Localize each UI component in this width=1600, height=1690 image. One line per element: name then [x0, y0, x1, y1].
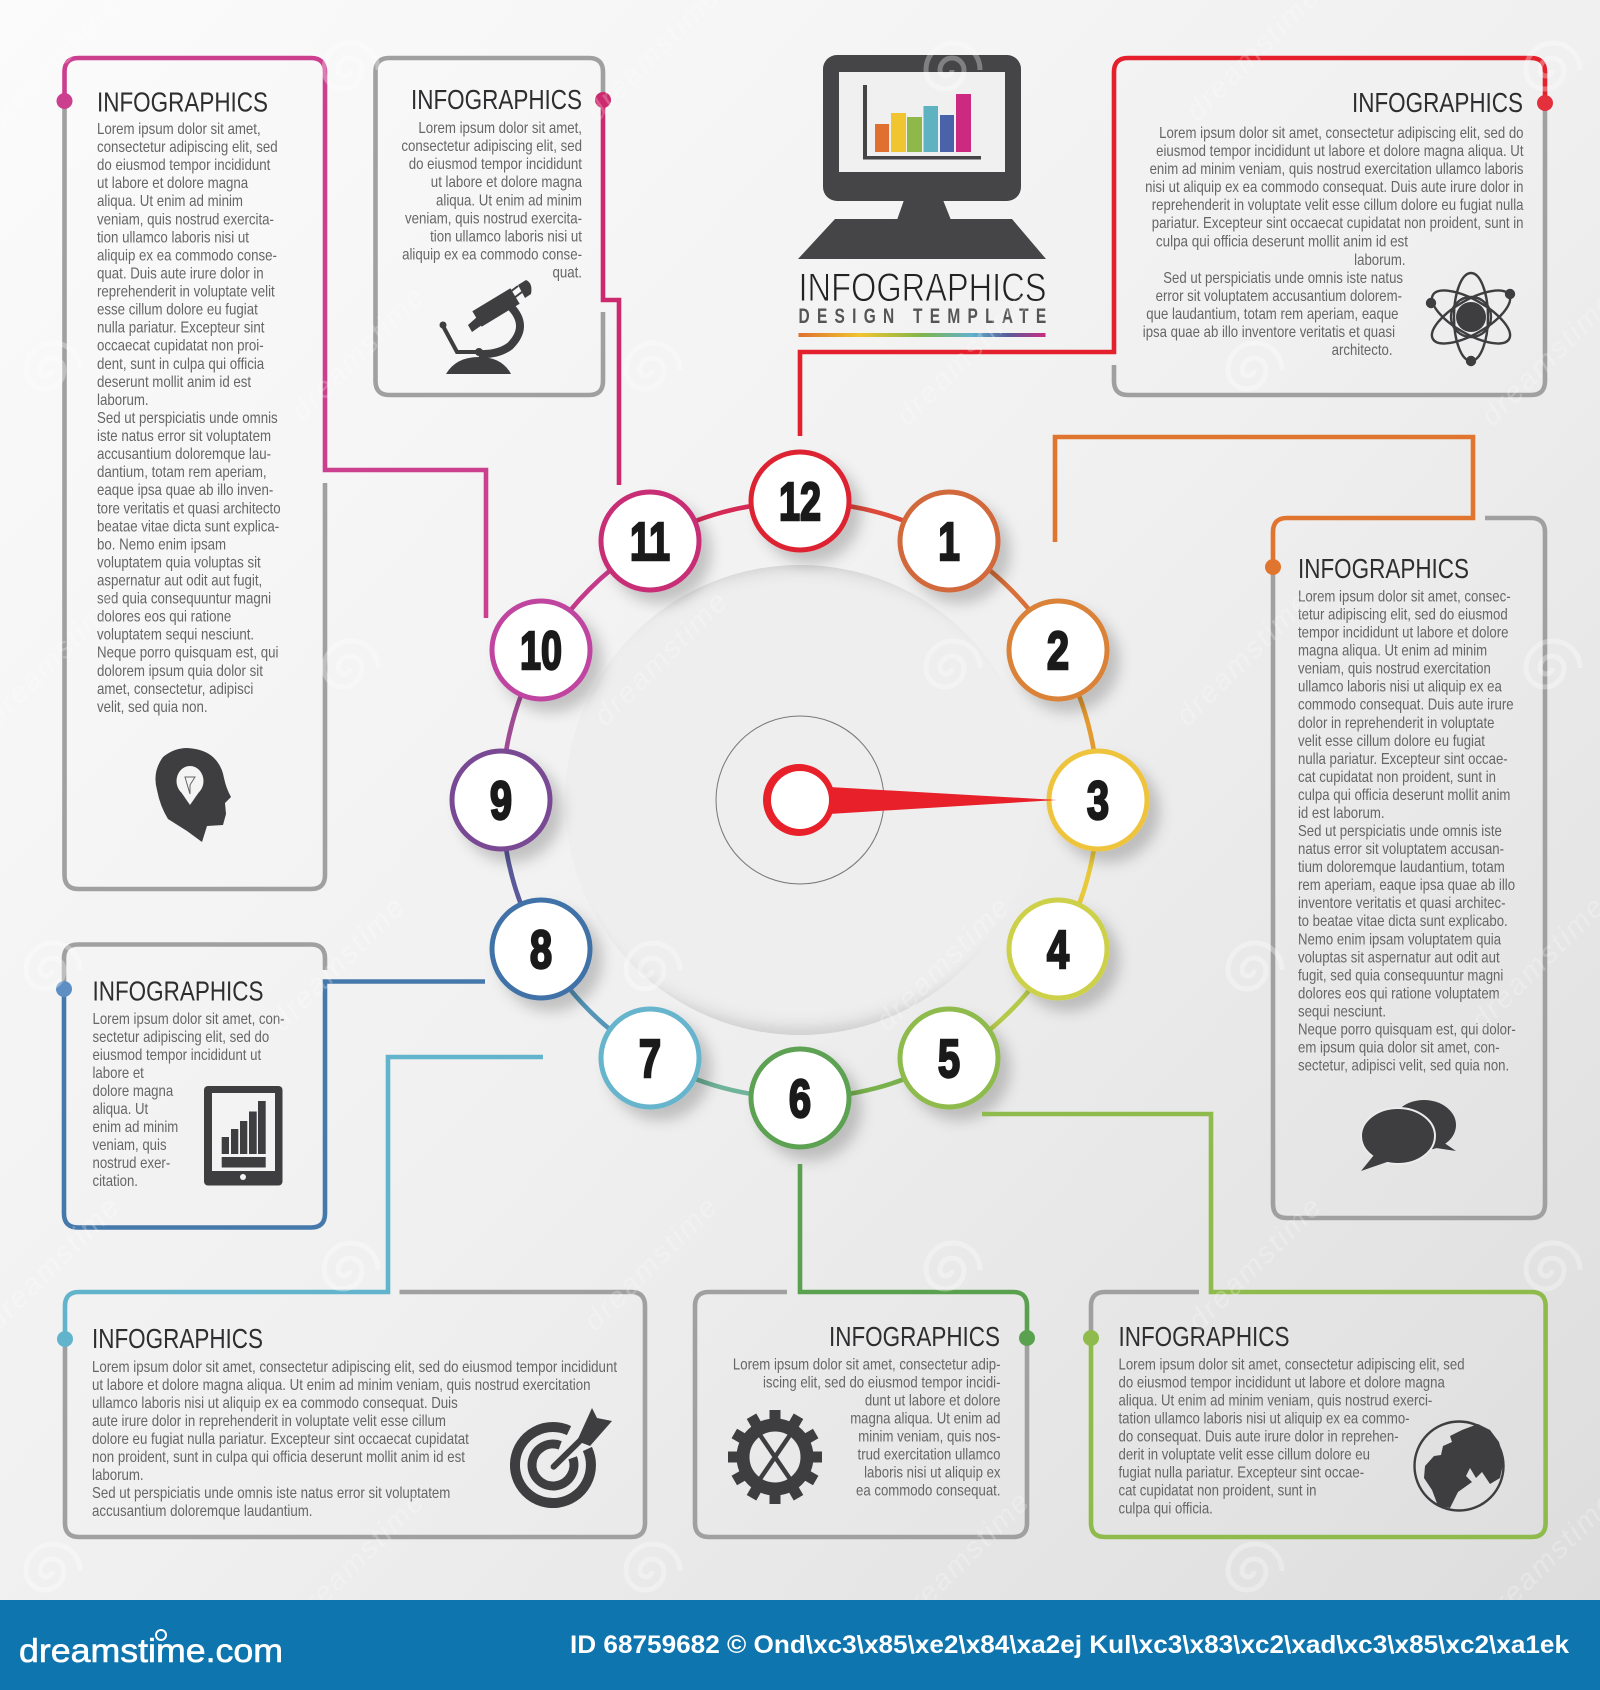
body text: iste natus error sit voluptatem: [97, 428, 271, 445]
body text: commodo consequat. Duis aute irure: [1298, 697, 1514, 714]
body text: laborum.: [97, 392, 149, 409]
body text: derit in voluptate velit esse cillum dolore eu: [1118, 1446, 1370, 1464]
dot: [1019, 1330, 1035, 1346]
icon: atom: [1424, 273, 1518, 365]
panel 7: bottom left panel: [57, 1057, 645, 1537]
body text: Lorem ipsum dolor sit amet, consectetur adipiscing elit, sed do eiusmod tempor incididunt: [92, 1359, 617, 1376]
body text: iscing elit, sed do eiusmod tempor incidi-: [763, 1374, 1001, 1392]
body text: Neque porro quisquam est, qui dolor-: [1298, 1021, 1516, 1039]
text: dreamstime: [889, 284, 1037, 432]
logo spiral: [156, 1630, 166, 1640]
body text: quat.: [552, 265, 582, 282]
body text: magna aliqua. Ut enim ad minim: [1298, 643, 1487, 660]
node 2: [1009, 601, 1107, 699]
body text: consectetur adipiscing elit, sed: [401, 138, 582, 155]
body text: culpa qui officia deserunt mollit anim: [1298, 787, 1510, 804]
body text: tium doloremque laudantium, totam: [1298, 859, 1505, 876]
title block with computer: [798, 55, 1046, 337]
node 1: [900, 492, 998, 590]
body text: amet, consectetur, adipisci: [97, 681, 253, 698]
text: dreamstime: [889, 1484, 1037, 1632]
dot: [1537, 95, 1553, 111]
body text: error sit voluptatem accusantium dolorem-: [1156, 288, 1402, 305]
body text: culpa qui officia deserunt mollit anim id est: [1156, 234, 1408, 251]
body text: labore et: [92, 1065, 144, 1082]
heading: INFOGRAPHICS: [1118, 1321, 1290, 1352]
body text: em ipsum quia dolor sit amet, con-: [1298, 1039, 1500, 1057]
dot: [57, 1331, 73, 1347]
footer logo: dreamstime.com: [19, 1632, 283, 1669]
body text: eaque ipsa quae ab illo inven-: [97, 482, 273, 500]
node 10: [492, 601, 590, 699]
body text: trud exercitation ullamco: [858, 1446, 1000, 1464]
body text: tore veritatis et quasi architecto: [97, 500, 281, 518]
body text: non proident, sunt in culpa qui officia deserunt mollit anim id est: [92, 1449, 465, 1466]
rainbow bar: [798, 333, 1046, 337]
panel 12: top right panel: [800, 58, 1553, 436]
text: dreamstime: [1169, 584, 1317, 732]
needle and hub: [763, 764, 1057, 836]
text: dreamstime: [869, 889, 1017, 1037]
body text: eiusmod tempor incididunt ut: [92, 1047, 261, 1064]
node 11: [601, 492, 699, 590]
body text: ut labore et dolore magna: [431, 174, 583, 192]
body text: deserunt mollit anim id est: [97, 374, 251, 391]
body text: inventore veritatis et quasi architec-: [1298, 895, 1506, 913]
body text: nulla pariatur. Excepteur sint occae-: [1298, 751, 1508, 768]
body text: Lorem ipsum dolor sit amet, consectetur adipiscing elit, sed: [1118, 1356, 1465, 1374]
recessed disk: [626, 565, 954, 1035]
text: dreamstime: [284, 279, 432, 427]
icon: head with lightbulb: [155, 748, 231, 842]
heading: INFOGRAPHICS: [411, 84, 582, 115]
node 9: 9: [490, 771, 512, 832]
body text: sed quia consequuntur magni: [97, 591, 271, 608]
icon: microscope: [440, 280, 531, 374]
body text: do eiusmod tempor incididunt ut labore et dolore magna: [1118, 1374, 1446, 1392]
node 4: 4: [1047, 920, 1070, 981]
body text: fugiat nulla pariatur. Excepteur sint occae-: [1118, 1464, 1364, 1482]
center dial: [452, 452, 1147, 1147]
body text: citation.: [92, 1173, 138, 1190]
node 9: [452, 751, 550, 849]
node 8: [492, 900, 590, 998]
node 11: 11: [630, 511, 670, 572]
node 5: [900, 1009, 998, 1107]
body text: aliquip ex ea commodo conse-: [402, 246, 582, 264]
body text: Lorem ipsum dolor sit amet, consec-: [1298, 588, 1511, 606]
footer credit: ID 68759682 © Ond\xc3\x85\xe2\x84\xa2ej Kul\xc3\x83\xc2\xad\xc3\x85\xc2\xa1ek: [570, 1631, 1569, 1659]
text: dreamstime: [264, 889, 412, 1037]
body text: ut labore et dolore magna aliqua. Ut enim ad minim veniam, quis nostrud exercitation: [92, 1377, 590, 1394]
body text: Sed ut perspiciatis unde omnis: [97, 410, 278, 427]
node 7: [601, 1009, 699, 1107]
panel 2: right tall panel: [1055, 437, 1545, 1218]
body text: veniam, quis nostrud exercita-: [97, 211, 274, 229]
main title: INFOGRAPHICS: [798, 266, 1046, 310]
body text: ipsa quae ab illo inventore veritatis et quasi: [1143, 324, 1395, 341]
body text: Lorem ipsum dolor sit amet, consectetur adip-: [733, 1356, 1001, 1374]
heading: INFOGRAPHICS: [97, 86, 268, 118]
node 12: 12: [779, 471, 821, 532]
body text: ullamco laboris nisi ut aliquip ex ea: [1298, 679, 1503, 696]
heading: INFOGRAPHICS: [1352, 87, 1523, 118]
dot: [56, 93, 72, 109]
body text: Lorem ipsum dolor sit amet,: [418, 120, 582, 137]
body text: voluptatem sequi nesciunt.: [97, 627, 254, 644]
body text: tion ullamco laboris nisi ut: [430, 228, 582, 246]
body text: tation ullamco laboris nisi ut aliquip ex ea commo-: [1118, 1410, 1410, 1428]
body text: [1143, 125, 1524, 359]
panel 5: bottom right panel: [982, 1114, 1546, 1537]
node 6: [751, 1049, 849, 1147]
body text: Sed ut perspiciatis unde omnis iste natus: [1163, 270, 1403, 287]
heading: INFOGRAPHICS: [92, 976, 264, 1006]
node 4: [1009, 900, 1107, 998]
body text: ullamco laboris nisi ut aliquip ex ea commodo consequat. Duis: [92, 1395, 458, 1412]
body text: tion ullamco laboris nisi ut: [97, 229, 249, 247]
body text: id est laborum.: [1298, 805, 1385, 822]
body text: nulla pariatur. Excepteur sint: [97, 320, 264, 337]
body text: dolor in reprehenderit in voluptate: [1298, 715, 1495, 732]
body text: dolore eu fugiat nulla pariatur. Excepteur sint occaecat cupidatat: [92, 1431, 469, 1448]
text: dreamstime: [587, 584, 735, 732]
body text: laborum.: [1354, 252, 1406, 269]
node 6: 6: [789, 1069, 811, 1130]
heading: INFOGRAPHICS: [829, 1321, 1000, 1352]
body text: tempor incididunt ut labore et dolore: [1298, 624, 1508, 642]
node 2: 2: [1047, 621, 1069, 682]
body text: culpa qui officia.: [1118, 1500, 1213, 1518]
body text: dolores eos qui ratione: [97, 609, 231, 626]
body text: pariatur. Excepteur sint occaecat cupidatat non proident, sunt in: [1152, 215, 1524, 232]
panel 8: tablet panel: [56, 944, 485, 1228]
icon: gear: [728, 1410, 822, 1504]
body text: Lorem ipsum dolor sit amet,: [97, 121, 261, 138]
icon: chat bubbles: [1361, 1100, 1456, 1171]
body text: consectetur adipiscing elit, sed: [97, 139, 278, 156]
panel 10: left tall panel: [56, 58, 486, 889]
icon: globe: [1414, 1422, 1504, 1510]
body text: minim veniam, quis nos-: [858, 1428, 1001, 1446]
body text: beatae vitae dicta sunt explica-: [97, 518, 279, 536]
body text: dunt ut labore et dolore: [865, 1392, 1000, 1410]
body text: do eiusmod tempor incididunt: [409, 156, 582, 173]
dot: [56, 981, 72, 997]
body text: voluptatem quia voluptas sit: [97, 554, 261, 572]
body text: veniam, quis nostrud exercitation: [1298, 661, 1491, 678]
node 8: 8: [530, 920, 552, 981]
body text: eiusmod tempor incididunt ut labore et dolore magna aliqua. Ut: [1156, 143, 1524, 160]
footer bar: [0, 1600, 1600, 1690]
node 3: [1049, 751, 1147, 849]
body text: ut labore et dolore magna: [97, 175, 249, 193]
body text: veniam, quis nostrud exercita-: [405, 210, 582, 228]
panel 6: bottom middle panel: [695, 1164, 1035, 1537]
icon: computer: [798, 55, 1046, 259]
body text: do consequat. Duis aute irure dolor in reprehen-: [1118, 1428, 1399, 1446]
node 10: 10: [520, 620, 562, 681]
text: dreamstime: [284, 1484, 432, 1632]
body text: laborum.: [92, 1467, 144, 1484]
body text: enim ad minim: [92, 1119, 178, 1136]
icon: target with arrow: [515, 1408, 612, 1503]
body text: quat. Duis aute irure dolor in: [97, 265, 264, 283]
body text: aliqua. Ut enim ad minim: [97, 193, 243, 211]
body text: cat cupidatat non proident, sunt in: [1118, 1482, 1316, 1500]
body text: Neque porro quisquam est, qui: [97, 645, 278, 662]
node 5: 5: [938, 1029, 960, 1090]
body text: aliqua. Ut enim ad minim: [436, 192, 582, 210]
body text: sectetur adipiscing elit, sed do: [92, 1029, 269, 1046]
body text: accusantium doloremque lau-: [97, 446, 271, 463]
body text: aspernatur aut odit aut fugit,: [97, 572, 262, 590]
body text: que laudantium, totam rem aperiam, eaque: [1146, 306, 1398, 323]
node 1: 1: [938, 511, 960, 571]
body text: do eiusmod tempor incididunt: [97, 157, 270, 174]
dot: [595, 92, 611, 108]
body text: sectetur, adipisci velit, sed quia non.: [1298, 1057, 1509, 1075]
body text: tetur adipiscing elit, sed do eiusmod: [1298, 606, 1508, 624]
body text: esse cillum dolore eu fugiat: [97, 302, 258, 319]
text: dreamstime: [577, 1189, 725, 1337]
body text: dolorem ipsum quia dolor sit: [97, 663, 263, 680]
dot: [1265, 559, 1281, 575]
dot: [1083, 1330, 1099, 1346]
panel 11: microscope panel: [376, 58, 619, 485]
subtitle: DESIGN TEMPLATE: [798, 303, 1046, 328]
body text: to beatae vitae dicta sunt explicabo.: [1298, 913, 1508, 931]
body text: Sed ut perspiciatis unde omnis iste: [1298, 823, 1502, 840]
body text: aliquip ex ea commodo conse-: [97, 247, 277, 265]
body text: Sed ut perspiciatis unde omnis iste natus error sit voluptatem: [92, 1485, 450, 1502]
body text: laboris nisi ut aliquip ex: [864, 1464, 1001, 1482]
body text: velit esse cillum dolore eu fugiat: [1298, 733, 1485, 750]
body text: natus error sit voluptatem accusan-: [1298, 841, 1504, 858]
body text: enim ad minim veniam, quis nostrud exercitation ullamco laboris: [1150, 161, 1524, 178]
body text: architecto.: [1332, 342, 1392, 359]
body text: fugit, sed quia consequuntur magni: [1298, 967, 1503, 985]
body text: velit, sed quia non.: [97, 699, 208, 716]
watermarks: [324, 43, 378, 89]
body text: occaecat cupidatat non proi-: [97, 338, 264, 355]
node 3: 3: [1087, 771, 1109, 832]
body text: dolores eos qui ratione voluptatem: [1298, 985, 1500, 1003]
body text: rem aperiam, eaque ipsa quae ab illo: [1298, 877, 1515, 895]
text: dreamstime: [1181, 1189, 1329, 1337]
body text: reprehenderit in voluptate velit: [97, 283, 275, 301]
body text: cat cupidatat non proident, sunt in: [1298, 769, 1496, 786]
body text: Nemo enim ipsam voluptatem quia: [1298, 931, 1502, 949]
body text: ea commodo consequat.: [856, 1482, 1000, 1500]
thin inner circle: [716, 716, 884, 884]
icon: tablet chart: [204, 1086, 282, 1186]
body text: voluptas sit aspernatur aut odit aut: [1298, 949, 1500, 967]
body text: dantium, totam rem aperiam,: [97, 464, 267, 481]
ring connectors: [502, 502, 1098, 1098]
body text: bo. Nemo enim ipsam: [97, 536, 226, 554]
body text: magna aliqua. Ut enim ad: [850, 1410, 1000, 1428]
body text: aute irure dolor in reprehenderit in voluptate velit esse cillum: [92, 1413, 446, 1430]
body text: nostrud exer-: [92, 1155, 170, 1172]
body text: dolore magna: [92, 1083, 174, 1100]
body text: accusantium doloremque laudantium.: [92, 1503, 312, 1520]
body text: aliqua. Ut enim ad minim veniam, quis nostrud exerci-: [1118, 1392, 1432, 1410]
heading: INFOGRAPHICS: [1298, 553, 1469, 584]
body text: Lorem ipsum dolor sit amet, con-: [92, 1011, 285, 1028]
body text: reprehenderit in voluptate velit esse cillum dolore eu fugiat nulla: [1152, 197, 1524, 214]
body text: Lorem ipsum dolor sit amet, consectetur adipiscing elit, sed do: [1159, 125, 1524, 142]
body text: nisi ut aliquip ex ea commodo consequat. Duis aute irure dolor in: [1145, 179, 1524, 196]
body text: dent, sunt in culpa qui officia: [97, 356, 265, 373]
heading: INFOGRAPHICS: [92, 1323, 263, 1354]
node 12: [751, 452, 849, 550]
node 7: 7: [639, 1029, 661, 1090]
body text: veniam, quis: [92, 1137, 167, 1154]
body text: sequi nesciunt.: [1298, 1003, 1386, 1021]
body text: aliqua. Ut: [92, 1101, 148, 1118]
